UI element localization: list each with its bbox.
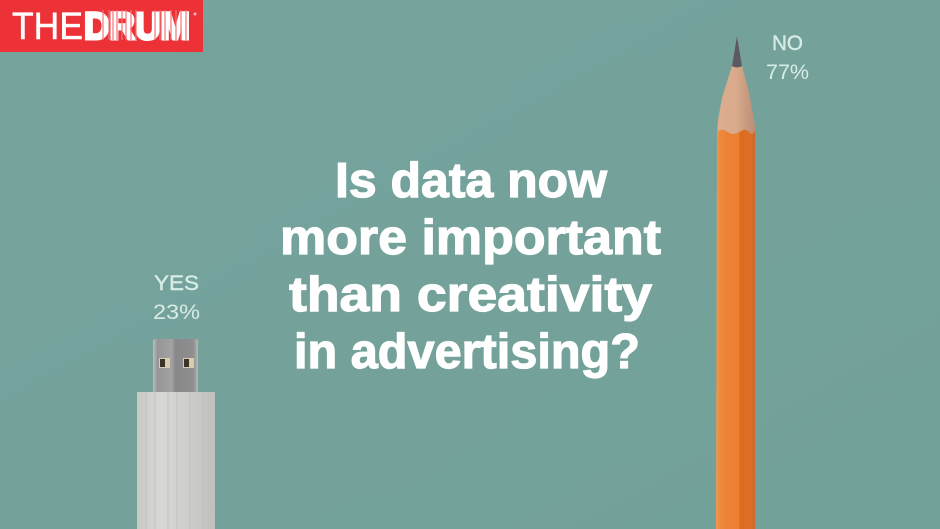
icon: USB stick bar bbox=[137, 339, 215, 529]
logo: The Drum: THE bbox=[12, 6, 83, 48]
label: yes 23%: 23% bbox=[153, 301, 200, 324]
logo: The Drum: DRUM bbox=[84, 6, 190, 48]
label: yes 23% bbox=[153, 272, 200, 324]
title: Is data now bbox=[335, 154, 608, 208]
label: no 77%: 77% bbox=[766, 61, 809, 84]
title: than creativity bbox=[289, 268, 652, 322]
title: in advertising? bbox=[294, 325, 640, 379]
label: no 77%: NO bbox=[772, 32, 803, 55]
title bbox=[280, 154, 661, 379]
label: yes 23%: YES bbox=[154, 272, 199, 295]
icon: pencil bar bbox=[716, 36, 755, 529]
title: more important bbox=[280, 211, 661, 265]
logo: The Drum bbox=[0, 0, 203, 52]
label: no 77% bbox=[766, 32, 809, 84]
